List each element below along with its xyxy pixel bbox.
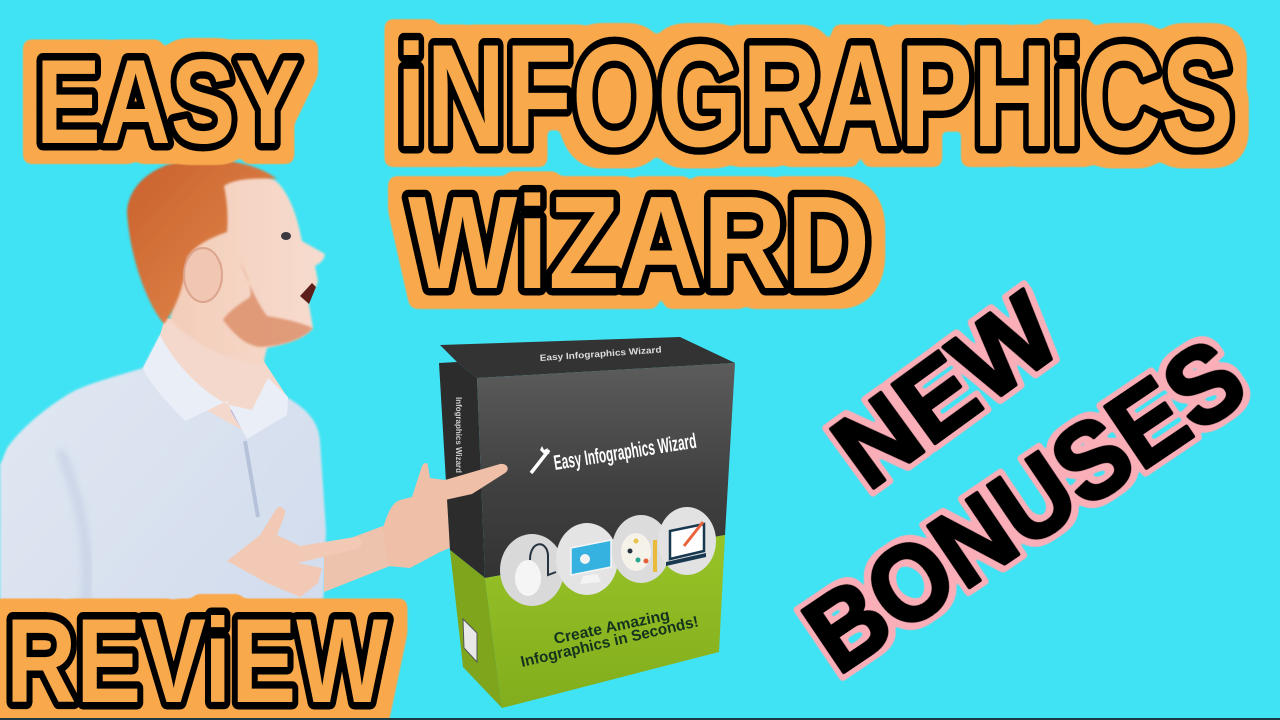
- box front dark: [477, 363, 735, 578]
- icon: palette circle: [612, 515, 670, 583]
- product box: [439, 337, 735, 708]
- icon: monitor circle: [556, 523, 618, 595]
- box front green: [485, 535, 725, 708]
- hair: [127, 160, 277, 324]
- pointing hand: [383, 463, 508, 568]
- box tagline: Create Amazing: [552, 607, 671, 648]
- ear: [184, 248, 222, 302]
- shirt: [0, 335, 326, 720]
- box lid: [440, 337, 735, 378]
- title: Easy: EASY: [36, 35, 300, 169]
- neck: [160, 318, 288, 430]
- label: bonuses: BONUSES: [783, 315, 1265, 695]
- barcode: [463, 619, 477, 662]
- beard: [223, 262, 313, 347]
- lower hand: [227, 507, 362, 597]
- mouth: [300, 283, 316, 304]
- icon: laptop circle: [658, 507, 716, 575]
- face: [170, 175, 325, 365]
- box tagline: Infographics in Seconds!: [519, 613, 700, 671]
- undershirt: [230, 410, 252, 430]
- side label: Infographics Wizard: [454, 397, 463, 473]
- pointing fingertip over box: [445, 464, 508, 500]
- box title: Easy Infographics Wizard: [552, 430, 698, 475]
- person: [0, 160, 508, 720]
- box side green: [450, 550, 502, 708]
- title: Wizard: WiZARD: [408, 169, 870, 316]
- eye: [281, 232, 291, 240]
- icon: mouse circle: [500, 534, 564, 606]
- arm: [324, 526, 390, 592]
- collar: [143, 335, 288, 439]
- label: new: NEW: [812, 271, 1080, 511]
- shirt placket: [245, 441, 258, 517]
- box side dark: [439, 362, 485, 578]
- sleeve shadow: [60, 450, 87, 640]
- bottom edge: [0, 718, 1280, 720]
- icon: magic wand: [531, 446, 550, 473]
- lid label: Easy Infographics Wizard: [539, 345, 662, 363]
